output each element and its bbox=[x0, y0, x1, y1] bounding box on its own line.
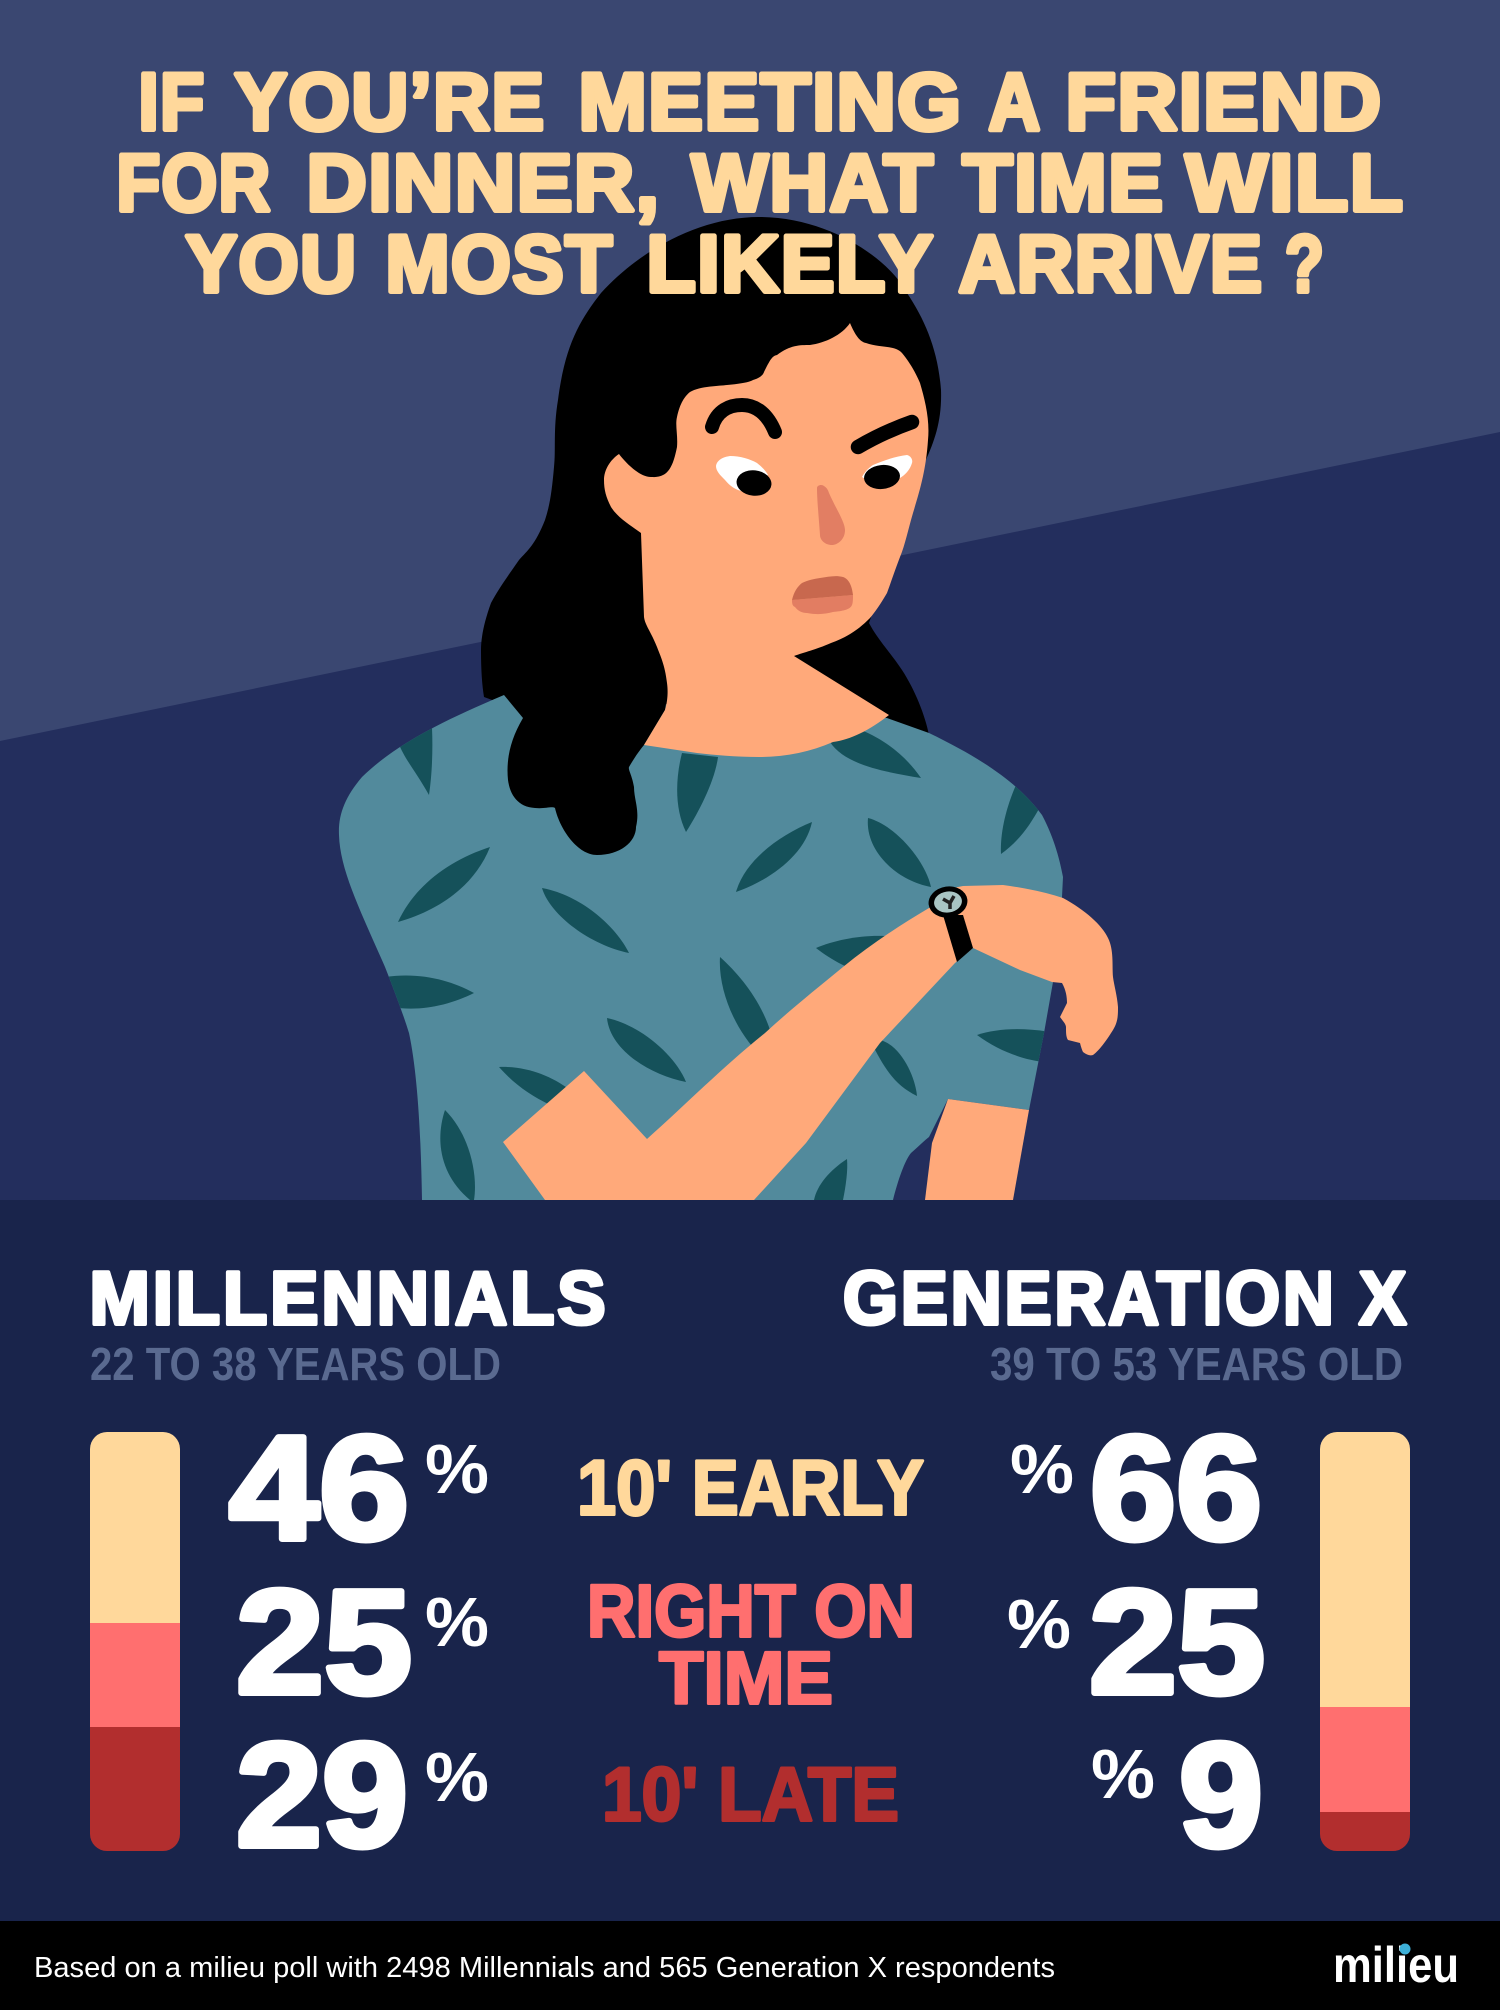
eyebrow: left bbox=[712, 405, 775, 432]
title: WHAT bbox=[692, 138, 934, 228]
generation x percentages: 66 bbox=[1090, 1406, 1262, 1571]
generation x percentages: % bbox=[1010, 1430, 1074, 1508]
title: A bbox=[988, 58, 1042, 148]
illustration: woman checking her watch bbox=[339, 217, 1118, 1200]
title: YOU’RE bbox=[234, 58, 546, 148]
title: LIKELY bbox=[646, 220, 934, 310]
generation x percentages bbox=[1007, 1406, 1265, 1878]
heading: generation x: GENERATION X bbox=[843, 1256, 1409, 1340]
label: 10 minutes early: 10' EARLY bbox=[577, 1444, 924, 1532]
generation x percentages: 25 bbox=[1089, 1560, 1265, 1725]
back hair bbox=[481, 217, 941, 740]
title: MEETING bbox=[578, 58, 962, 148]
lower arm bbox=[925, 1099, 1029, 1200]
shirt leaf pattern bbox=[385, 728, 1050, 1200]
heading: millennials bbox=[90, 1256, 608, 1390]
title: TIME bbox=[962, 138, 1164, 228]
title: WILL bbox=[1186, 138, 1404, 228]
face, ear and neck bbox=[604, 323, 928, 757]
raised arm and hand bbox=[503, 885, 1118, 1200]
panel: results bbox=[0, 1200, 1500, 1921]
nose bbox=[817, 485, 845, 545]
millennials percentages: % bbox=[425, 1738, 489, 1816]
title: FRIEND bbox=[1066, 58, 1382, 148]
title bbox=[116, 58, 1404, 310]
footnote: Based on a milieu poll with 2498 Millennials and 565 Generation X respondents bbox=[34, 1952, 1055, 1984]
generation x percentages: 9 bbox=[1179, 1713, 1263, 1878]
logo: milieu: milieu bbox=[1333, 1937, 1459, 1993]
title: DINNER, bbox=[306, 138, 660, 228]
background: upper and lower diagonal panels bbox=[0, 0, 1500, 1200]
eyebrow: right bbox=[858, 422, 912, 447]
millennials percentages: % bbox=[425, 1430, 489, 1508]
title: MOST bbox=[386, 220, 614, 310]
millennials percentages bbox=[229, 1406, 489, 1878]
label: right on time bbox=[587, 1570, 915, 1720]
mouth bbox=[792, 576, 853, 614]
stacked bar: generation x bbox=[1320, 1432, 1410, 1851]
generation x percentages: % bbox=[1091, 1735, 1155, 1813]
eye: right bbox=[862, 455, 912, 491]
title: FOR bbox=[116, 138, 272, 228]
title: ? bbox=[1285, 220, 1325, 310]
heading: generation x: 39 TO 53 YEARS OLD bbox=[990, 1338, 1403, 1390]
footer bbox=[0, 1921, 1500, 2010]
eye: left bbox=[716, 456, 773, 497]
icon: wristwatch bbox=[927, 884, 973, 962]
heading: generation x bbox=[843, 1256, 1409, 1390]
heading: millennials: 22 TO 38 YEARS OLD bbox=[90, 1338, 501, 1390]
label: right on time: TIME bbox=[659, 1636, 833, 1720]
millennials percentages: 46 bbox=[229, 1406, 409, 1571]
title: ARRIVE bbox=[958, 220, 1264, 310]
title: IF bbox=[138, 58, 206, 148]
generation x percentages: % bbox=[1007, 1585, 1071, 1663]
stacked bar: millennials bbox=[90, 1432, 180, 1851]
label: 10 minutes late: 10' LATE bbox=[602, 1752, 899, 1838]
front hair lock bbox=[504, 640, 670, 855]
label: right on time: RIGHT ON bbox=[587, 1570, 915, 1652]
millennials percentages: 25 bbox=[236, 1560, 412, 1725]
shirt bbox=[339, 695, 1063, 1200]
millennials percentages: 29 bbox=[236, 1713, 408, 1878]
title: YOU bbox=[186, 220, 358, 310]
millennials percentages: % bbox=[425, 1583, 489, 1661]
heading: millennials: MILLENNIALS bbox=[90, 1256, 608, 1340]
